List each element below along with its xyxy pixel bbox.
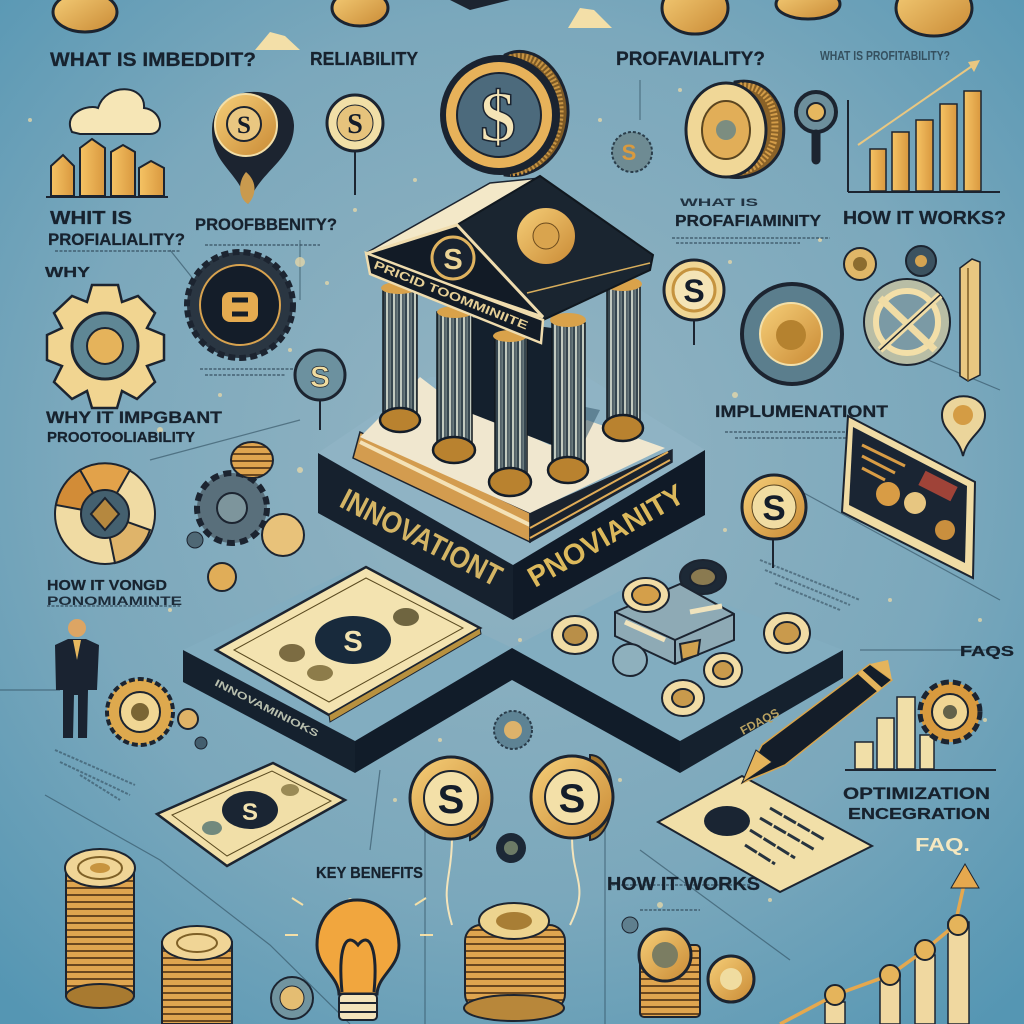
icon: coin pin [212, 92, 294, 204]
heading: what is profitability right: WHAT IS [680, 197, 758, 209]
icon: small pin [942, 396, 985, 456]
chart: growth bars top right [848, 60, 1000, 192]
icon: coin gear left [107, 679, 207, 749]
icon: S coin [327, 95, 383, 195]
icon: small S coin: S [622, 140, 636, 165]
icon: twin coins: S [438, 778, 464, 822]
banknote small [157, 763, 345, 866]
coin stack right [622, 917, 754, 1017]
icon: S pin left [295, 350, 345, 430]
heading: what is profitability left: PROFIALIALITY? [48, 230, 185, 249]
heading: how it works bottom: HOW IT WORKS [607, 874, 760, 894]
heading: what is profitability right [675, 197, 821, 230]
icon: coin with ribbed side [686, 81, 784, 178]
heading: faq cream: FAQ. [915, 835, 970, 855]
pediment [368, 225, 543, 317]
columns [383, 287, 640, 479]
icon: ring coin [742, 284, 842, 384]
icon: S coin middle right: S [762, 489, 786, 528]
heading: how it works: HOW IT WORKS? [843, 208, 1006, 228]
banknote large [216, 567, 481, 722]
heading: why important: WHY IT IMPGBANT [46, 408, 223, 427]
back wall [470, 317, 552, 445]
heading: proofbenity: PROOFBBENITY? [195, 215, 337, 234]
heading: why: WHY [45, 264, 90, 281]
lower platform [183, 570, 843, 773]
heading: optimization: OPTIMIZATION [843, 784, 990, 803]
icon: cloud [70, 89, 160, 134]
column capitals [381, 277, 642, 342]
heading: reliability: RELIABILITY [310, 49, 418, 69]
temple [353, 176, 672, 542]
main platform [318, 377, 705, 620]
icon: tablet dashboard [842, 416, 975, 578]
coin pile right [552, 560, 810, 716]
heading: what is: WHAT IS IMBEDDIT? [50, 50, 256, 71]
heading: optimization [843, 784, 990, 823]
frieze [366, 253, 543, 343]
heading: key benefits: KEY BENEFITS [316, 865, 423, 882]
heading: faint what is: WHAT IS PROFITABILITY? [820, 48, 950, 63]
icon: center coin stack [464, 903, 565, 1021]
icon: gear large [47, 285, 164, 408]
icon: coin pin: S [237, 112, 251, 139]
icon: gears and coins cluster [187, 442, 304, 591]
pediment coin [432, 237, 474, 279]
icon: hero coin: $ [480, 77, 516, 157]
temple floor [360, 377, 665, 513]
icon: twin coins: S [559, 777, 585, 821]
banknote large: S [343, 626, 363, 658]
heading: how it works left: PONOMIAMINTE [47, 594, 182, 608]
coin stack tall [65, 849, 135, 1008]
heading: how it works left [47, 577, 182, 608]
icon: S pin right upper [664, 260, 724, 345]
temple base [353, 453, 672, 540]
icon: pen and document [658, 660, 892, 892]
heading: what is profitability left: WHIT IS [50, 208, 132, 228]
speckles [28, 88, 987, 908]
icon: compass ring [864, 279, 950, 365]
icon: light bulb [285, 898, 433, 1020]
heading: how it works left: HOW IT VONGD [47, 577, 167, 594]
heading: what is profitability left [48, 208, 185, 249]
banknote small: S [242, 799, 258, 826]
column bases [380, 408, 643, 496]
top row coins [53, 0, 972, 50]
chart: bars with gear [845, 682, 996, 770]
platform: label left: INNOVAMINIOKS [213, 678, 321, 740]
roof cream slope [366, 178, 540, 253]
heading: why important: PROOTOOLIABILITY [47, 429, 195, 446]
temple: S [443, 244, 463, 276]
heading: what is profitability right: PROFAFIAMINITY [675, 213, 821, 230]
money bundle [615, 584, 734, 664]
roof coin [516, 207, 576, 265]
frieze text: PRICID TOOMMINIITE [372, 258, 530, 333]
heading: faqs: FAQS [960, 643, 1014, 660]
chart: donut wheel [55, 463, 155, 564]
icon: dark gear coin [187, 252, 293, 358]
coin stack short [162, 926, 232, 1024]
roof hip [457, 176, 653, 320]
icon: S pin left: S [310, 361, 330, 394]
platform: label right: FDAQS [738, 706, 781, 738]
platform text: innovation: INNOVATIONT [335, 483, 507, 593]
icon: businessman [55, 619, 99, 738]
icon: small S coin [612, 132, 652, 172]
chart: growth arrow bottom right [780, 864, 979, 1024]
icon: hero coin [440, 51, 568, 176]
chart: small bars left [46, 139, 168, 197]
platform text: profitability: PNOVIANITY [522, 479, 690, 594]
icon: tall bar [960, 259, 980, 381]
heading: implementation: IMPLUMENATIONT [715, 402, 889, 421]
heading: optimization: ENCEGRATION [848, 806, 990, 823]
heading: why important [46, 408, 223, 446]
icon: S coin: S [347, 109, 363, 140]
icon: S coin middle right [742, 475, 806, 568]
icon: S pin right upper: S [683, 273, 705, 309]
fine text lines [47, 238, 880, 910]
icon: magnifier [796, 92, 836, 160]
icon: small coin bottom left [271, 977, 313, 1019]
icon: coin top center lower [494, 711, 532, 749]
heading: profitability top: PROFAVIALITY? [616, 49, 765, 70]
icon: twin coins [410, 755, 613, 925]
icon: small coins upper right [844, 246, 936, 280]
